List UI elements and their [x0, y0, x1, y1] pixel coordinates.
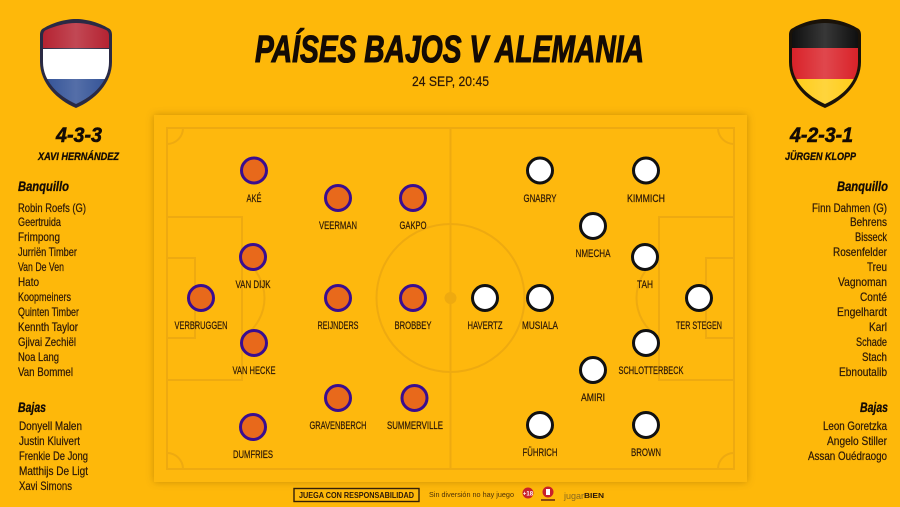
footer: responsible gaming strip — [294, 486, 604, 502]
panel: Netherlands substitutes: Geertruida — [18, 215, 61, 229]
panel: Netherlands substitutes: Van Bommel — [18, 365, 73, 379]
footer: responsible gaming strip: JUEGA CON RESPONSABILIDAD — [299, 491, 414, 500]
panel: Netherlands absences: Justin Kluivert — [19, 434, 81, 448]
player: Veerman: VEERMAN — [319, 220, 357, 232]
panel: Germany substitutes: Karl — [869, 320, 887, 334]
player: Führich — [522, 412, 558, 459]
player: Nmecha: NMECHA — [576, 248, 611, 260]
panel: Netherlands substitutes: Hato — [18, 275, 39, 289]
player: Schlotterbeck: SCHLOTTERBECK — [618, 365, 684, 377]
panel: Germany substitutes: Conté — [860, 290, 887, 304]
panel: Netherlands substitutes: Gjivai Zechiël — [18, 335, 76, 349]
player: Havertz — [468, 286, 503, 332]
player: Musiala: MUSIALA — [522, 320, 558, 332]
player: Amiri — [580, 358, 606, 404]
panel: Germany absences — [808, 399, 888, 463]
panel: Germany substitutes: Bisseck — [855, 230, 888, 244]
panel: Germany absences: Bajas — [860, 399, 888, 415]
panel: football pitch — [154, 115, 747, 482]
player: Kimmich: KIMMICH — [627, 193, 665, 205]
panel: Netherlands absences: Frenkie De Jong — [19, 449, 88, 463]
panel: Netherlands substitutes: Frimpong — [18, 230, 60, 244]
icon: Germany shield — [789, 19, 861, 109]
left formation and coach — [37, 124, 120, 163]
player: Gravenberch — [310, 386, 367, 432]
panel: Netherlands substitutes: Noa Lang — [18, 350, 59, 364]
panel: Germany substitutes — [812, 178, 888, 379]
player: Gakpo — [400, 186, 427, 232]
left formation and coach: XAVI HERNÁNDEZ — [37, 150, 120, 163]
player: Van Dijk: VAN DIJK — [236, 279, 271, 291]
footer: responsible gaming strip: jugar — [563, 491, 584, 502]
player: Amiri: AMIRI — [581, 392, 605, 404]
player: Ter Stegen: TER STEGEN — [676, 320, 722, 332]
player: Schlotterbeck — [618, 330, 684, 377]
panel: Germany substitutes: Ebnoutalib — [839, 365, 887, 379]
match date: 24 SEP, 20:45 — [412, 73, 489, 89]
left formation and coach: 4-3-3 — [55, 124, 102, 147]
players: Netherlands — [174, 158, 443, 461]
panel: Germany absences: Leon Goretzka — [823, 419, 887, 433]
player: Tah: TAH — [637, 279, 653, 291]
player: Veerman — [319, 186, 357, 232]
right formation and coach — [785, 124, 857, 163]
player: Aké: AKÉ — [246, 192, 262, 205]
panel: Netherlands substitutes: Banquillo — [18, 178, 69, 194]
footer: responsible gaming strip: Sin diversión no hay juego — [429, 490, 514, 499]
panel: Netherlands absences — [18, 399, 89, 493]
panel: Netherlands substitutes: Van De Ven — [18, 260, 64, 274]
panel: Germany substitutes: Banquillo — [837, 178, 888, 194]
footer: responsible gaming strip: BIEN — [584, 491, 604, 500]
panel: Netherlands absences: Xavi Simons — [19, 479, 72, 493]
right formation and coach: JÜRGEN KLOPP — [785, 150, 857, 163]
panel: Netherlands substitutes — [18, 178, 86, 379]
panel: Germany substitutes: Schade — [856, 335, 887, 349]
player: Reijnders: REIJNDERS — [318, 320, 358, 332]
panel: Germany absences: Angelo Stiller — [827, 434, 887, 448]
player: Führich: FÜHRICH — [522, 447, 558, 459]
player: Summerville — [387, 386, 443, 432]
title: PAÍSES BAJOS V ALEMANIA — [255, 27, 644, 71]
panel: Germany substitutes: Rosenfelder — [833, 245, 887, 259]
panel: Netherlands absences: Donyell Malen — [19, 419, 82, 433]
player: Ter Stegen — [676, 286, 722, 332]
panel: Netherlands substitutes: Quinten Timber — [18, 305, 79, 319]
player: Musiala — [522, 286, 558, 332]
player: Havertz: HAVERTZ — [468, 320, 503, 332]
player: Gravenberch: GRAVENBERCH — [310, 420, 367, 432]
player: Brobbey — [394, 286, 432, 332]
panel: Netherlands absences: Matthijs De Ligt — [19, 464, 89, 478]
player: Reijnders — [318, 286, 358, 332]
panel: Netherlands absences: Bajas — [18, 399, 46, 415]
player: Tah — [632, 244, 658, 291]
panel: Netherlands substitutes: Kennth Taylor — [18, 320, 78, 334]
panel: Germany substitutes: Treu — [867, 260, 887, 274]
icon: Netherlands shield — [40, 19, 112, 109]
panel: Netherlands substitutes: Koopmeiners — [18, 290, 71, 304]
player: Van Hecke: VAN HECKE — [232, 365, 276, 377]
player: Gnabry — [524, 158, 557, 205]
player: Dumfries: DUMFRIES — [233, 449, 273, 461]
player: Van Dijk — [236, 244, 271, 291]
right formation and coach: 4-2-3-1 — [789, 124, 853, 147]
player: Brobbey: BROBBEY — [394, 320, 432, 332]
panel: Germany substitutes: Stach — [862, 350, 887, 364]
player: Dumfries — [233, 414, 273, 461]
player: Gakpo: GAKPO — [400, 220, 427, 232]
player: Verbruggen — [174, 286, 228, 332]
player: Van Hecke — [232, 330, 276, 377]
footer: responsible gaming strip: +18 — [523, 492, 534, 498]
player: Kimmich — [627, 158, 665, 205]
panel: Germany substitutes: Vagnoman — [838, 275, 887, 289]
player: Verbruggen: VERBRUGGEN — [174, 320, 228, 332]
player: Summerville: SUMMERVILLE — [387, 420, 443, 432]
player: Brown: BROWN — [631, 447, 661, 459]
player: Nmecha — [576, 214, 611, 260]
panel: Germany substitutes: Engelhardt — [837, 305, 888, 319]
players: Germany — [468, 158, 722, 459]
player: Brown — [631, 412, 661, 459]
panel: Germany substitutes: Behrens — [850, 215, 887, 229]
panel: Netherlands substitutes: Jurriën Timber — [18, 245, 77, 259]
panel: Netherlands substitutes: Robin Roefs (G) — [18, 201, 86, 215]
player: Gnabry: GNABRY — [524, 193, 557, 205]
player: Aké — [242, 158, 266, 205]
